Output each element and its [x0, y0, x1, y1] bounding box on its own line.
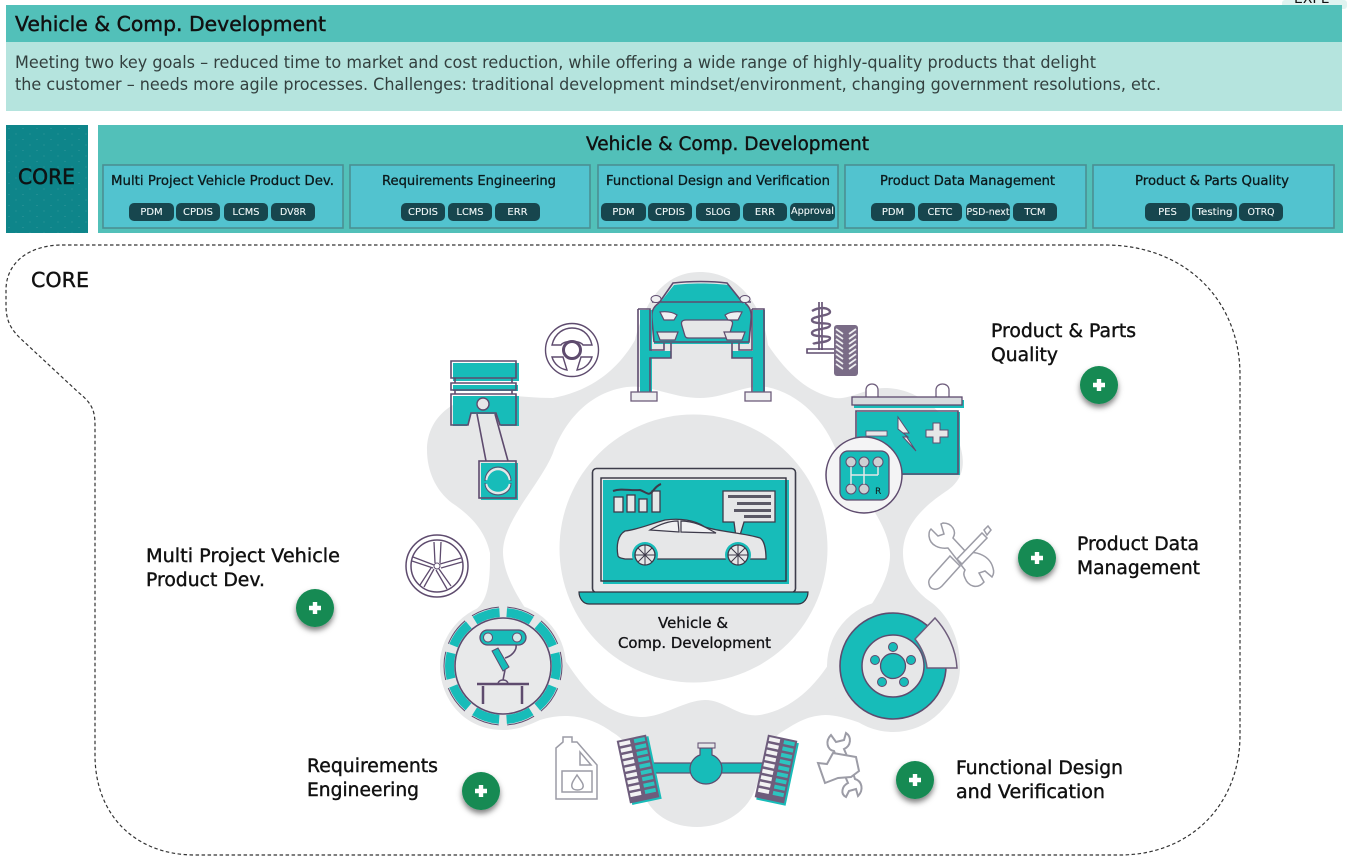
header panel — [6, 5, 1342, 111]
icon: piston — [451, 361, 519, 500]
icon: suspension and tire — [807, 302, 858, 376]
center label: Comp. Development — [618, 634, 771, 652]
plus button — [296, 589, 334, 627]
icon: tools — [929, 523, 994, 589]
icon: brake disc — [840, 613, 957, 719]
icon: alloy wheel — [406, 535, 468, 597]
label: functional design: and Verification — [956, 782, 1105, 803]
card: multi project: PDM — [140, 207, 163, 218]
description text: the customer – needs more agile processes. Challenges: traditional development mindset/environment, changing government resolutions, etc. — [15, 75, 1161, 94]
icon: robot gear — [444, 607, 562, 725]
label: functional design — [896, 758, 1123, 803]
icon: oil jug — [556, 737, 597, 799]
icon: axle — [617, 734, 799, 806]
capability panel — [98, 125, 1343, 233]
icon: gear shifter — [826, 437, 902, 513]
card: multi project: Multi Project Vehicle Product Dev. — [111, 173, 334, 189]
center label — [618, 614, 771, 652]
capability heading: Vehicle & Comp. Development — [586, 134, 869, 155]
card: product data: PSD-next — [966, 207, 1010, 218]
plus button — [1018, 539, 1056, 577]
label: product data management — [1018, 534, 1200, 579]
plus button — [462, 772, 500, 810]
CORE badge — [6, 125, 88, 233]
plus button — [896, 761, 934, 799]
label: product and parts quality: Product & Parts — [991, 321, 1136, 342]
card: functional design: SLOG — [706, 207, 730, 218]
card: requirements: CPDIS — [408, 207, 438, 218]
card: multi project: CPDIS — [183, 207, 213, 218]
card: product data: TCM — [1023, 207, 1046, 218]
label: requirements engineering — [307, 756, 500, 810]
card: functional design — [598, 165, 838, 228]
card: parts quality — [1093, 165, 1334, 228]
brake lobe backing — [827, 600, 959, 732]
dashed region outline — [6, 245, 1240, 855]
label: requirements engineering: Requirements — [307, 756, 438, 777]
icon: battery — [852, 384, 964, 475]
icon: hand with wrench — [818, 733, 862, 797]
gray lobed ring — [427, 272, 963, 827]
card: functional design: Functional Design and Verification — [606, 173, 830, 189]
card: product data: CETC — [928, 207, 953, 218]
label: product data management: Product Data — [1077, 534, 1199, 555]
card: functional design: PDM — [612, 207, 635, 218]
card: product data — [845, 165, 1086, 228]
center circle — [560, 414, 828, 682]
title: Vehicle & Comp. Development — [15, 12, 326, 36]
label: functional design: Functional Design — [956, 758, 1123, 779]
card: multi project: DV8R — [280, 207, 306, 218]
card: functional design: ERR — [755, 207, 775, 218]
description text: Meeting two key goals – reduced time to market and cost reduction, while offering a wide range of highly-quality products that delight — [15, 53, 1096, 72]
center label: Vehicle & — [658, 614, 728, 632]
region label: CORE — [31, 268, 89, 292]
card: requirements — [350, 165, 590, 228]
card: functional design: CPDIS — [655, 207, 685, 218]
card: parts quality: Product & Parts Quality — [1135, 173, 1289, 189]
icon: laptop — [579, 468, 808, 604]
label: product data management: Management — [1077, 558, 1200, 579]
card: parts quality: Testing — [1195, 207, 1232, 218]
gear lobe backing — [440, 603, 566, 729]
laptop note callout — [723, 491, 775, 545]
description text — [15, 53, 1161, 94]
label: multi project: Multi Project Vehicle — [146, 546, 340, 567]
laptop car — [617, 519, 766, 568]
card: parts quality: OTRQ — [1248, 207, 1275, 218]
card: multi project: LCMS — [232, 207, 260, 218]
laptop chart — [613, 484, 661, 512]
icon: gear shifter: R — [875, 487, 881, 497]
card: requirements: ERR — [507, 207, 528, 218]
card: product data: Product Data Management — [880, 173, 1055, 189]
card: multi project — [103, 165, 343, 228]
label: product and parts quality — [991, 321, 1136, 404]
card: requirements: Requirements Engineering — [382, 173, 556, 189]
icon: steering wheel — [546, 324, 598, 376]
plus button — [1080, 366, 1118, 404]
card: parts quality: PES — [1158, 207, 1177, 218]
CORE badge: CORE — [18, 165, 75, 189]
top right tab — [1282, 0, 1347, 9]
icon: car lift — [631, 282, 771, 401]
label: product and parts quality: Quality — [991, 345, 1058, 366]
label: requirements engineering: Engineering — [307, 780, 419, 801]
label: multi project — [146, 546, 340, 627]
card: requirements: LCMS — [456, 207, 484, 218]
label: multi project: Product Dev. — [146, 570, 265, 591]
card: product data: PDM — [882, 207, 904, 218]
card: functional design: Approval — [791, 206, 834, 217]
